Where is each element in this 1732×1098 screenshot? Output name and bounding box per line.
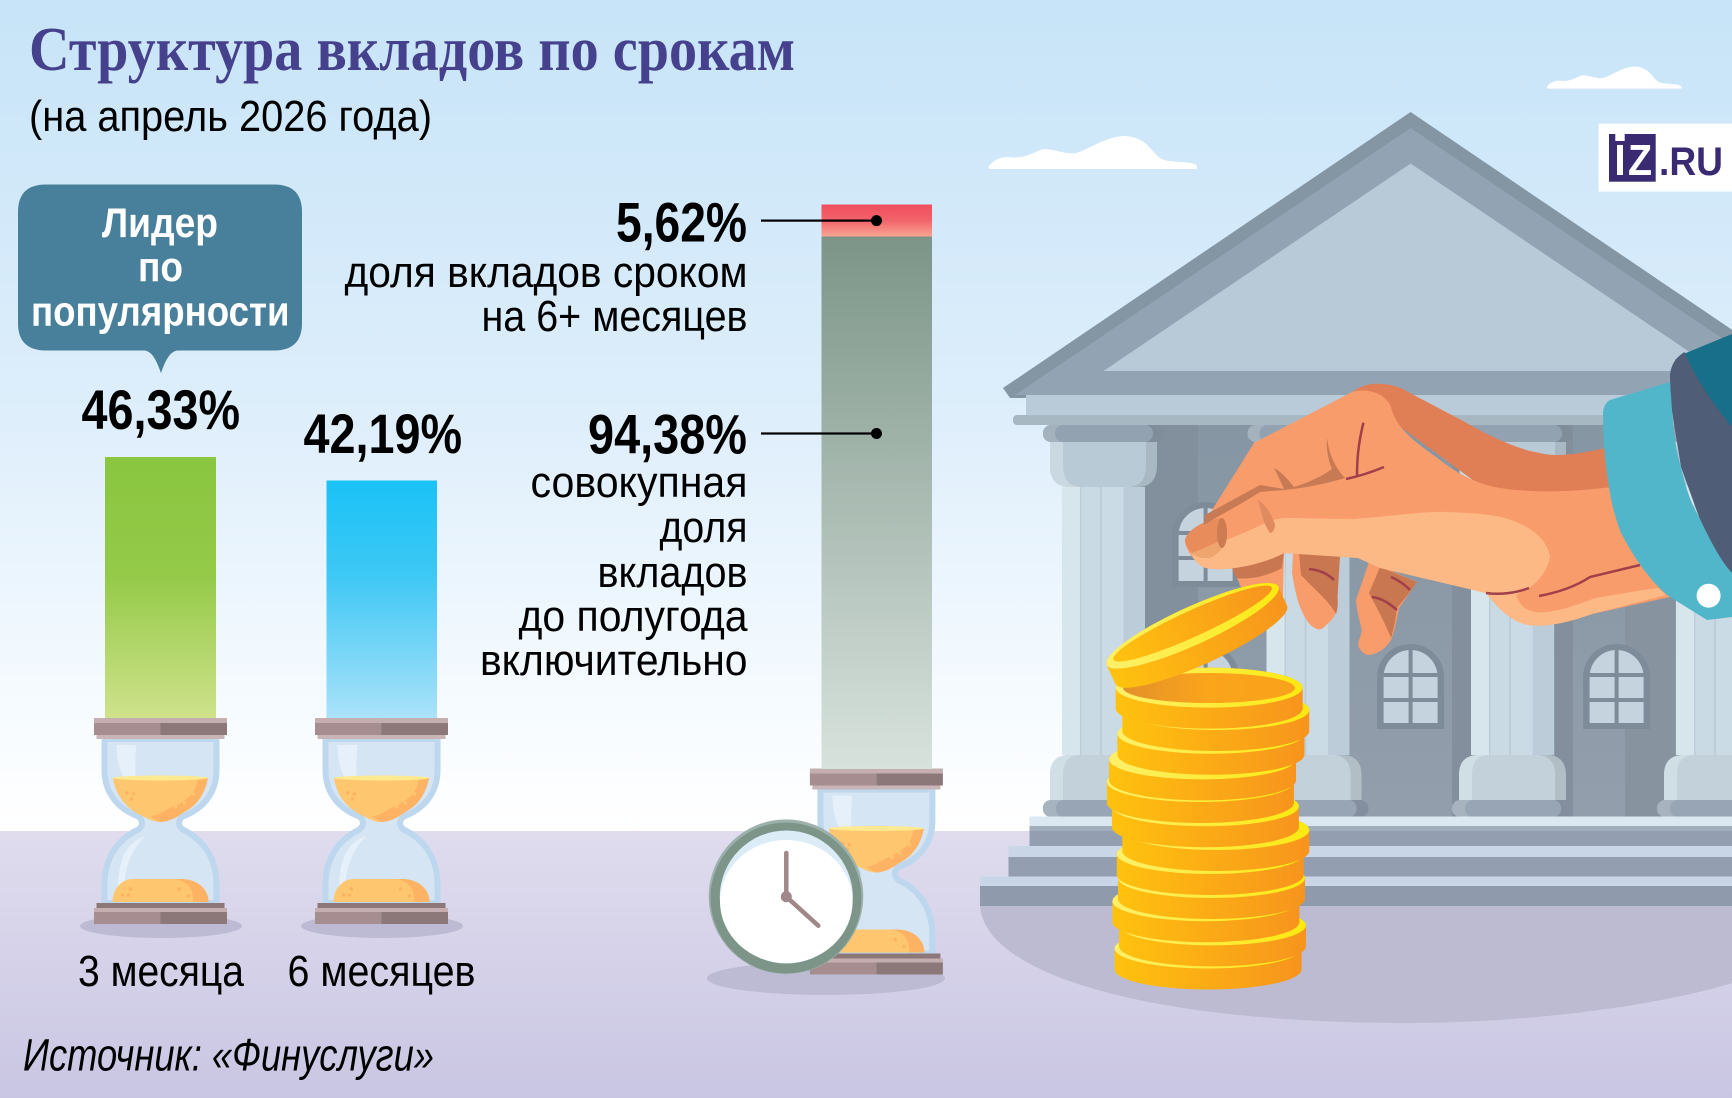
text block: 5,62% <box>344 190 748 341</box>
bar: 6 months: 42,19% <box>304 402 462 465</box>
label: 6 months: 6 месяцев <box>288 947 476 996</box>
text block: 94,38%: вкладов <box>598 548 748 597</box>
cloud right <box>1547 66 1682 89</box>
logo: Z <box>1628 136 1652 185</box>
logo <box>1599 124 1732 192</box>
subtitle: (на апрель 2026 года) <box>29 92 432 141</box>
top coin inner face <box>1123 673 1295 703</box>
coin stack <box>1099 569 1309 990</box>
sleeve <box>1675 334 1732 430</box>
hourglass: 3 months <box>94 718 227 924</box>
callout: leader: по <box>138 243 183 290</box>
stacked bar: total <box>822 204 932 769</box>
finger under coin <box>1232 552 1284 605</box>
clock shadow <box>707 962 945 995</box>
hand with sleeve <box>1185 334 1732 655</box>
ring finger <box>1356 562 1417 655</box>
pediment tympanum <box>1104 164 1718 371</box>
fingernail <box>1217 518 1227 548</box>
callout: leader: Лидер <box>102 199 218 246</box>
title: Структура вкладов по срокам <box>29 16 795 84</box>
label: 3 months: 3 месяца <box>78 947 244 996</box>
source: Источник: «Финуслуги» <box>23 1030 434 1080</box>
frieze <box>1026 395 1732 415</box>
cornice <box>1013 415 1732 425</box>
text block: 94,38%: доля <box>660 503 748 552</box>
shadow: 3 months <box>80 914 242 938</box>
bar: 6 months <box>304 402 462 719</box>
cuff <box>1603 382 1732 620</box>
text block: 94,38%: включительно <box>480 636 748 685</box>
leader line 5,62% <box>761 215 882 226</box>
thumb and light underside <box>1191 512 1666 626</box>
bar: 3 months <box>82 378 240 719</box>
bank ground shadow <box>980 906 1732 1023</box>
logo: .RU <box>1659 140 1723 184</box>
bank wall <box>1100 425 1732 817</box>
text block: 94,38% <box>480 402 748 685</box>
shadow: 6 months <box>301 914 463 938</box>
logo: I <box>1614 136 1626 185</box>
bank roof <box>1003 112 1732 398</box>
bank building <box>980 112 1732 906</box>
skin fold small <box>1258 500 1275 533</box>
columns <box>1043 425 1164 817</box>
hand back <box>1352 384 1610 500</box>
callout: leader <box>18 184 302 373</box>
stacked coins <box>1115 928 1302 990</box>
leader line 94,38% <box>761 428 882 439</box>
windows <box>1172 502 1239 587</box>
cuff button <box>1697 584 1721 608</box>
text block: 94,38%: совокупная <box>530 458 748 507</box>
clock <box>709 819 863 974</box>
bar: 3 months: 46,33% <box>82 378 240 441</box>
text block: 94,38%: 94,38% <box>588 402 747 466</box>
jacket lining <box>1670 352 1732 600</box>
background sky <box>0 0 1732 832</box>
text block: 5,62%: доля вкладов сроком <box>344 248 748 297</box>
cloud left <box>989 136 1197 169</box>
tilted coin <box>1099 569 1295 701</box>
hourglass: 6 months <box>315 718 448 924</box>
text block: 5,62%: 5,62% <box>616 190 747 254</box>
finger creases <box>1309 569 1410 610</box>
hand palm <box>1185 391 1670 626</box>
crease lines <box>1346 423 1640 596</box>
hourglass: total <box>810 768 943 974</box>
fingertip <box>1185 518 1227 558</box>
steps <box>1030 816 1732 826</box>
background ground <box>0 831 1732 1098</box>
skin folds <box>1204 438 1345 525</box>
callout: leader: популярности <box>31 288 290 334</box>
middle finger <box>1292 552 1340 629</box>
text block: 94,38%: до полугода <box>518 592 748 641</box>
text block: 5,62%: на 6+ месяцев <box>482 292 748 341</box>
